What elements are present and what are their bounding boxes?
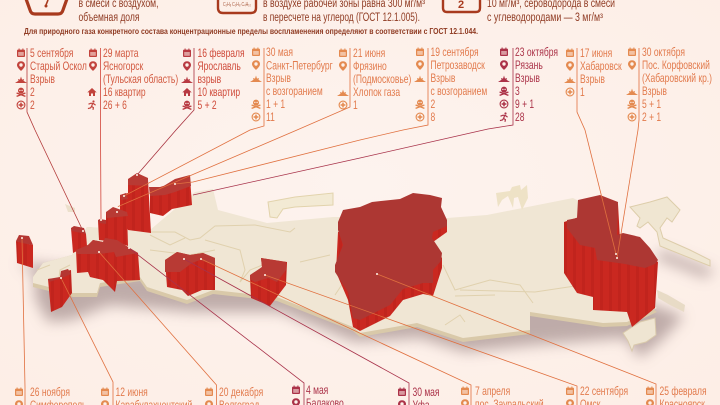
text: hydrogen sulfide limit: с углеводородами — 3 мг/м³ [487,12,603,24]
event: Ясногорск: Ясногорск [103,61,144,73]
region: Ryazan [106,207,128,246]
event: Санкт-Петербург [250,47,333,124]
region: Volgograd and Saratov [76,238,140,292]
line: Ясногорск [100,48,102,220]
event: Петрозаводск [414,46,487,124]
event: Рязань: 23 октября [515,46,558,59]
event: Карабулак [101,387,192,405]
event: Ярославль: 16 февраля [198,47,245,60]
event: Старый Оскол: 2 [30,87,35,99]
region: Omsk [250,258,287,306]
event: Хабаровск: 17 июня [580,48,612,60]
event: Санкт-Петербург: 30 мая [266,47,293,59]
event: Ярославль: взрыв [198,74,221,86]
event: Балаково: 4 мая [306,385,328,397]
event: Омск: 22 сентября [580,385,628,398]
event: пос. Корфовский: 5 + 1 [642,99,661,111]
line: Красноярск [377,274,656,405]
event: Балаково [292,385,344,405]
event: Рязань: 3 [515,86,520,98]
region: Belgorod [71,226,87,253]
icon: H2S formula [443,0,480,12]
event: Рязань: 9 + 1 [515,99,534,111]
event: пос. Корфовский [626,46,712,124]
event: Волгоград [205,386,263,405]
map land edge [33,192,657,342]
region: Yaroslavl [128,173,151,233]
map: Russia base [33,185,710,351]
event: Уфа: 30 мая [412,387,440,399]
line: Уфа [184,259,409,405]
region: Karelia [149,175,192,216]
event: Старый Оскол: Взрыв [30,74,55,86]
event: Ясногорск: (Тульская область) [103,73,178,86]
event: Санкт-Петербург: Санкт-Петербург [266,59,333,73]
region: Moscow [120,193,128,230]
text: workzone limit: в пересчете на углерод (ГОСТ 12.1.005). [263,12,420,24]
event: Фрязино: (Подмосковье) [353,74,411,86]
event: Хабаровск: 1 [580,87,585,99]
line: Фрязино [117,48,350,207]
event: Санкт-Петербург: с возгоранием [266,86,323,98]
location dots [21,174,618,279]
line: Волгоград [99,252,216,405]
line: Ярославль [137,48,194,175]
map: Severnaya Zemlya [496,185,528,210]
event: Рязань [498,46,558,124]
event: Ярославль: 5 + 2 [198,100,217,112]
map shadow [18,250,714,358]
event: Ясногорск: 26 + 6 [103,100,127,112]
event: пос. Корфовский: Пос. Корфовский [642,59,710,72]
event: Фрязино: Фрязино [353,61,387,73]
map: Sakhalin [657,290,685,312]
line: Симферополь [22,238,25,405]
event: Симферополь [15,386,86,405]
event: Рязань: Взрыв [515,73,540,85]
text: workzone limit [263,0,425,24]
event: Ярославль: 10 квартир [198,87,240,99]
region: Krasnoyarsk [335,193,447,331]
event: Старый Оскол: 5 сентября [30,47,73,60]
event: Старый Оскол [15,47,87,112]
region: Ingushetia [48,269,72,312]
event: Ярославль: Ярославль [198,61,241,73]
text: gas mixture [78,0,158,24]
region: Khabarovsk krai [564,195,658,327]
event: Рязань: 28 [515,112,525,124]
event: Рязань: Рязань [515,60,543,72]
event: пос. Корфовский: (Хабаровский кр.) [642,72,712,85]
line: пос. Корфовский [617,48,639,258]
map: Kamchatka and Chukotka [630,197,710,266]
line: Балаково [129,248,304,405]
event: Фрязино: 21 июня [353,48,385,60]
event: Фрязино [337,48,411,112]
event: Старый Оскол: Старый Оскол [30,61,87,73]
line: Старый Оскол [27,48,83,231]
map: Primorye [623,318,656,351]
event: Фрязино: Хлопок газа [353,87,400,99]
event: пос. Зауральский: 7 апреля [475,386,510,398]
event: Санкт-Петербург: 11 [266,112,275,124]
event: пос. Корфовский: 30 октября [642,46,685,59]
event: Симферополь: 26 ноября [30,386,70,399]
map land top [33,189,657,338]
event: Уфа [398,387,440,405]
event: пос. Корфовский: Взрыв [642,86,667,98]
event: Петрозаводск: 19 сентября [430,46,479,59]
event: Петрозаводск: Взрыв [430,73,455,85]
event: Петрозаводск: 8 [430,112,436,124]
line: Петрозаводск [175,48,428,184]
line: Карабулак [61,278,113,405]
map: internal borders [37,225,575,325]
event: Петрозаводск: 2 [430,99,436,111]
icon: hydrocarbons: C₂H₆ C₃H₈ C₄H₁₀ [223,2,251,8]
text: hydrogen sulfide limit [487,0,615,24]
line: Хабаровск [577,48,616,254]
event: Ясногорск [87,48,178,112]
text: gas mixture: объемная доля [78,12,140,24]
event: Красноярск [646,385,707,405]
region: Crimea [16,235,33,268]
note: Для природного газа конкретного состава концентрационные пределы воспламенения определяют в соответствии с ГОСТ 12.1.044. [24,27,478,36]
event: Хабаровск: Хабаровск [580,60,622,73]
event: Омск [566,385,628,405]
event: Красноярск: 25 февраля [660,385,707,398]
event: Петрозаводск: Петрозаводск [430,60,485,72]
event: пос. Зауральский [461,386,544,405]
region: Bashkortostan [165,252,215,296]
event: пос. Корфовский: 2 + 1 [642,112,661,124]
event: Петрозаводск: с возгоранием [430,86,487,98]
icon: gauge [25,0,68,14]
map: Novaya Zemlya [268,193,333,218]
line: Рязань [193,48,513,195]
line: Омск [265,275,577,405]
line: Санкт-Петербург [124,48,264,196]
region: Tula [98,219,107,241]
line: Зауральский [201,259,471,405]
icon: hydrocarbons [218,0,256,13]
map: Kaliningrad [65,204,75,212]
event: Хабаровск: Взрыв [580,74,605,86]
event: Санкт-Петербург: Взрыв [266,73,291,85]
event: Ясногорск: 16 квартир [103,87,146,99]
event: Волгоград: 20 декабря [219,386,263,399]
leader lines [22,48,656,405]
event: Старый Оскол: 2 [30,100,35,112]
event: Санкт-Петербург: 1 + 1 [266,99,285,111]
event: Ярославль [181,47,245,112]
event: Ясногорск: 29 марта [103,48,139,60]
event: Хабаровск [564,48,622,99]
event: Фрязино: 1 [353,100,358,112]
event: Карабулак: 12 июня [116,387,148,399]
